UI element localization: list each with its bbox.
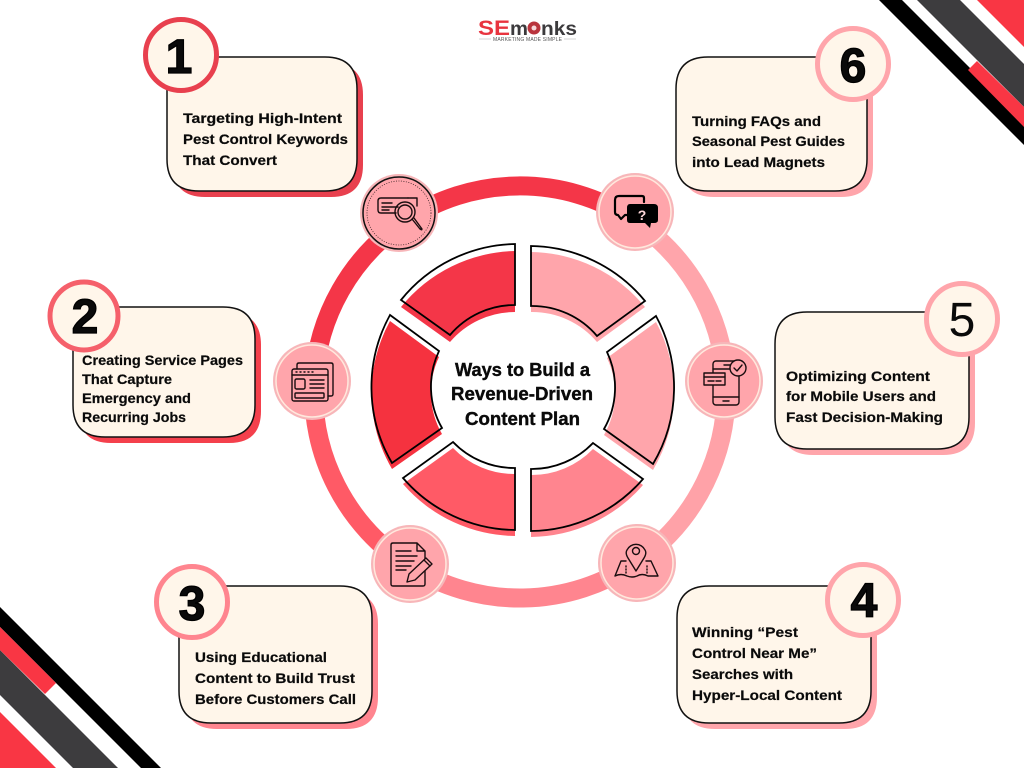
segment: left — [371, 315, 442, 469]
number badge 3 — [156, 566, 228, 638]
icon: question chat: ? — [638, 207, 646, 223]
card 3 text — [195, 649, 356, 707]
card 5 text: Optimizing Content — [786, 368, 930, 384]
card 1 text: Pest Control Keywords — [183, 131, 348, 147]
number badge 1 — [146, 20, 216, 90]
card 4 text: Hyper-Local Content — [692, 687, 842, 703]
card 2 — [50, 282, 261, 443]
card 4 text: Control Near Me” — [692, 645, 817, 661]
card 3 — [156, 566, 378, 729]
number badge 4 — [828, 564, 898, 636]
number badge 5: 5 — [949, 294, 975, 347]
center title: Content Plan — [465, 409, 580, 429]
decoration: bottom left corner stripes — [0, 607, 161, 768]
logo: MARKETING MADE SIMPLE — [493, 37, 563, 43]
icon: document with pencil — [371, 525, 449, 603]
logo — [478, 17, 577, 43]
icon: keyword search — [360, 174, 438, 252]
icon: web page — [273, 342, 351, 420]
decoration: top right corner stripes — [879, 0, 1024, 145]
card 5 text: Fast Decision-Making — [786, 409, 943, 425]
number badge 5 — [926, 284, 998, 354]
segment: top right — [531, 246, 645, 342]
card 2 text — [82, 352, 243, 425]
segment: bottom left — [403, 442, 515, 536]
card 1 text: That Convert — [183, 152, 277, 168]
card 3 text: Content to Build Trust — [195, 670, 355, 686]
icon: map pin — [598, 524, 676, 602]
card 4 text: Searches with — [692, 666, 793, 682]
number badge 6: 6 — [840, 40, 866, 93]
outer ring — [314, 186, 726, 598]
card 6 text: into Lead Magnets — [692, 154, 825, 170]
card 5 text: for Mobile Users and — [786, 388, 936, 404]
center title — [451, 360, 593, 429]
card 4 text — [692, 624, 842, 703]
card 2 text: That Capture — [82, 371, 172, 387]
card 3 text: Before Customers Call — [195, 691, 356, 707]
card 6 text: Turning FAQs and — [692, 113, 821, 129]
card 3 text: Using Educational — [195, 649, 327, 665]
segment: top left — [401, 244, 515, 342]
segment: bottom right — [531, 443, 643, 537]
card 1 — [146, 20, 363, 197]
card 5 — [775, 284, 998, 455]
number badge 3: 3 — [179, 578, 205, 631]
center title: Revenue-Driven — [451, 384, 593, 404]
card 6 text — [692, 113, 845, 170]
number badge 1: 1 — [166, 31, 192, 84]
logo: m — [510, 19, 528, 40]
card 2 text: Creating Service Pages — [82, 352, 243, 368]
number badge 4: 4 — [851, 575, 878, 628]
center title: Ways to Build a — [455, 360, 591, 380]
donut chart: six segments — [371, 244, 674, 537]
number badge 2: 2 — [72, 291, 98, 344]
card 4 — [677, 564, 898, 729]
card 6 text: Seasonal Pest Guides — [692, 133, 845, 149]
card 4 text: Winning “Pest — [692, 624, 798, 640]
logo: SE — [478, 17, 510, 40]
icon: question chat — [596, 173, 674, 251]
logo: nks — [541, 19, 577, 40]
card 5 text — [786, 368, 943, 425]
number badge 6 — [818, 28, 888, 100]
card 1 text — [183, 110, 348, 168]
segment: right — [604, 316, 674, 470]
number badge 2 — [50, 282, 118, 350]
card 2 text: Emergency and — [82, 390, 191, 406]
card 1 text: Targeting High-Intent — [183, 110, 342, 126]
card 2 text: Recurring Jobs — [82, 409, 186, 425]
icon: mobile phone — [685, 342, 763, 420]
card 6 — [676, 28, 888, 197]
